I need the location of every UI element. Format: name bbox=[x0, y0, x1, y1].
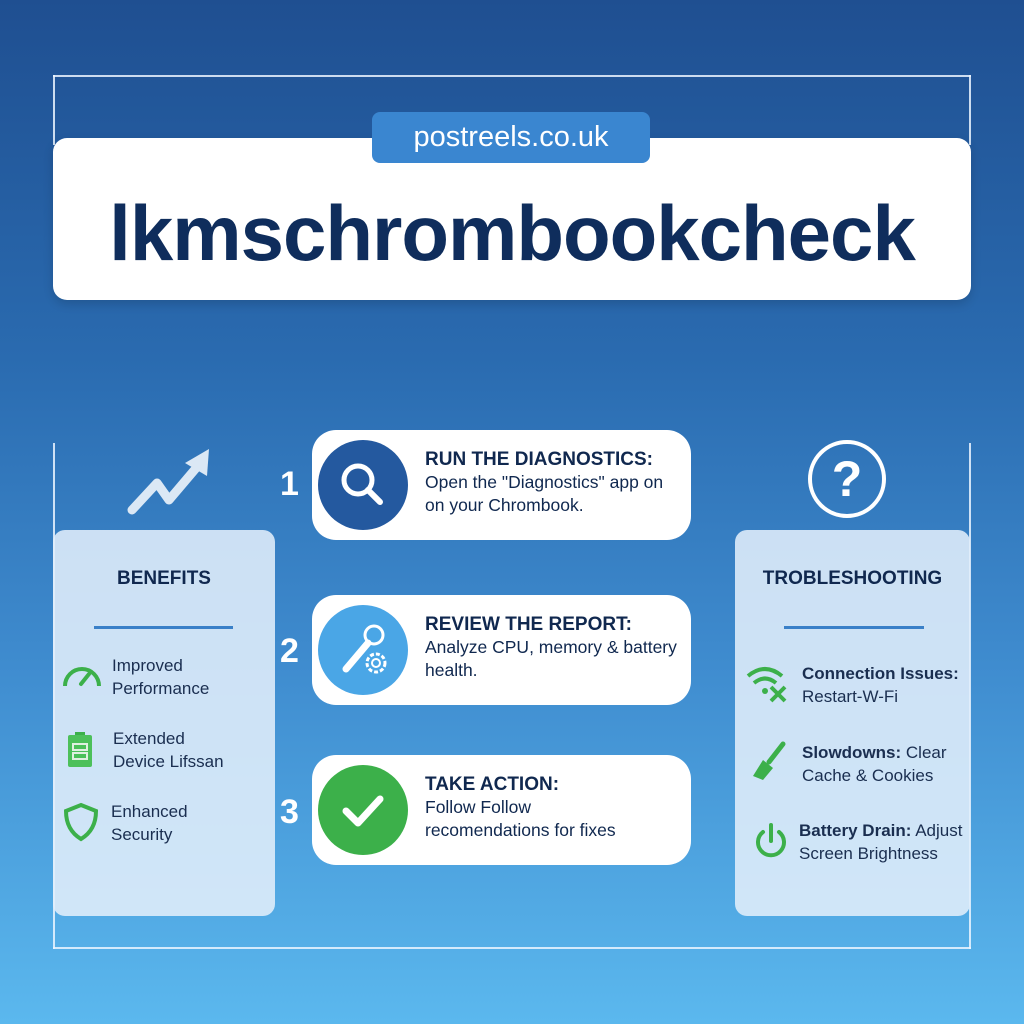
panel: troubleshooting: Screen Brightness bbox=[799, 844, 938, 863]
site pill bbox=[372, 112, 650, 163]
step card 1: RUN THE DIAGNOSTICS: bbox=[425, 449, 653, 470]
icon: wifi off bbox=[746, 666, 786, 702]
icon: brush bbox=[753, 742, 786, 780]
panel: troubleshooting: Restart-W-Fi bbox=[802, 687, 898, 706]
panel: benefits: Enhanced bbox=[111, 802, 188, 821]
icon: battery bbox=[68, 732, 92, 767]
step card 2: REVIEW THE REPORT: bbox=[425, 614, 632, 635]
panel: benefits: Security bbox=[111, 825, 172, 844]
step card 1: Open the "Diagnostics" app on bbox=[425, 472, 663, 492]
panel: troubleshooting bbox=[735, 530, 970, 916]
step card 2 bbox=[312, 595, 691, 705]
step number 2: 2 bbox=[280, 632, 299, 670]
step card 1: on your Chrombook. bbox=[425, 495, 584, 515]
icon: trend arrow bbox=[128, 449, 209, 514]
panel: benefits: Improved bbox=[112, 656, 183, 675]
site pill: postreels.co.uk bbox=[413, 121, 609, 153]
step number 3: 3 bbox=[280, 793, 299, 831]
panel: benefits: Device Lifssan bbox=[113, 752, 224, 771]
icon: gauge bbox=[63, 667, 101, 686]
panel: benefits: Extended bbox=[113, 729, 185, 748]
panel: benefits: BENEFITS bbox=[117, 568, 211, 589]
panel: troubleshooting: Battery Drain: Adjust bbox=[799, 821, 962, 840]
title: lkmschrombookcheck bbox=[109, 189, 915, 277]
step card 3: recomendations for fixes bbox=[425, 820, 616, 840]
step number 1: 1 bbox=[280, 465, 299, 503]
icon: question bbox=[808, 440, 886, 518]
step card 2: Analyze CPU, memory & battery bbox=[425, 637, 677, 657]
step card 3 bbox=[312, 755, 691, 865]
step card 3: Follow Follow bbox=[425, 797, 531, 817]
title card bbox=[53, 138, 971, 300]
step card 2: health. bbox=[425, 660, 478, 680]
panel: troubleshooting: Slowdowns: Clear bbox=[802, 743, 947, 762]
icon: power bbox=[756, 823, 786, 858]
panel: benefits bbox=[53, 530, 275, 916]
panel: benefits: Performance bbox=[112, 679, 209, 698]
panel: troubleshooting: Cache & Cookies bbox=[802, 766, 933, 785]
panel: troubleshooting: TROBLESHOOTING bbox=[763, 568, 942, 589]
step card 3: TAKE ACTION: bbox=[425, 774, 559, 795]
icon: question: ? bbox=[832, 451, 862, 507]
icon: shield bbox=[64, 802, 98, 842]
panel: troubleshooting: Connection Issues: bbox=[802, 664, 959, 683]
step card 1 bbox=[312, 430, 691, 540]
